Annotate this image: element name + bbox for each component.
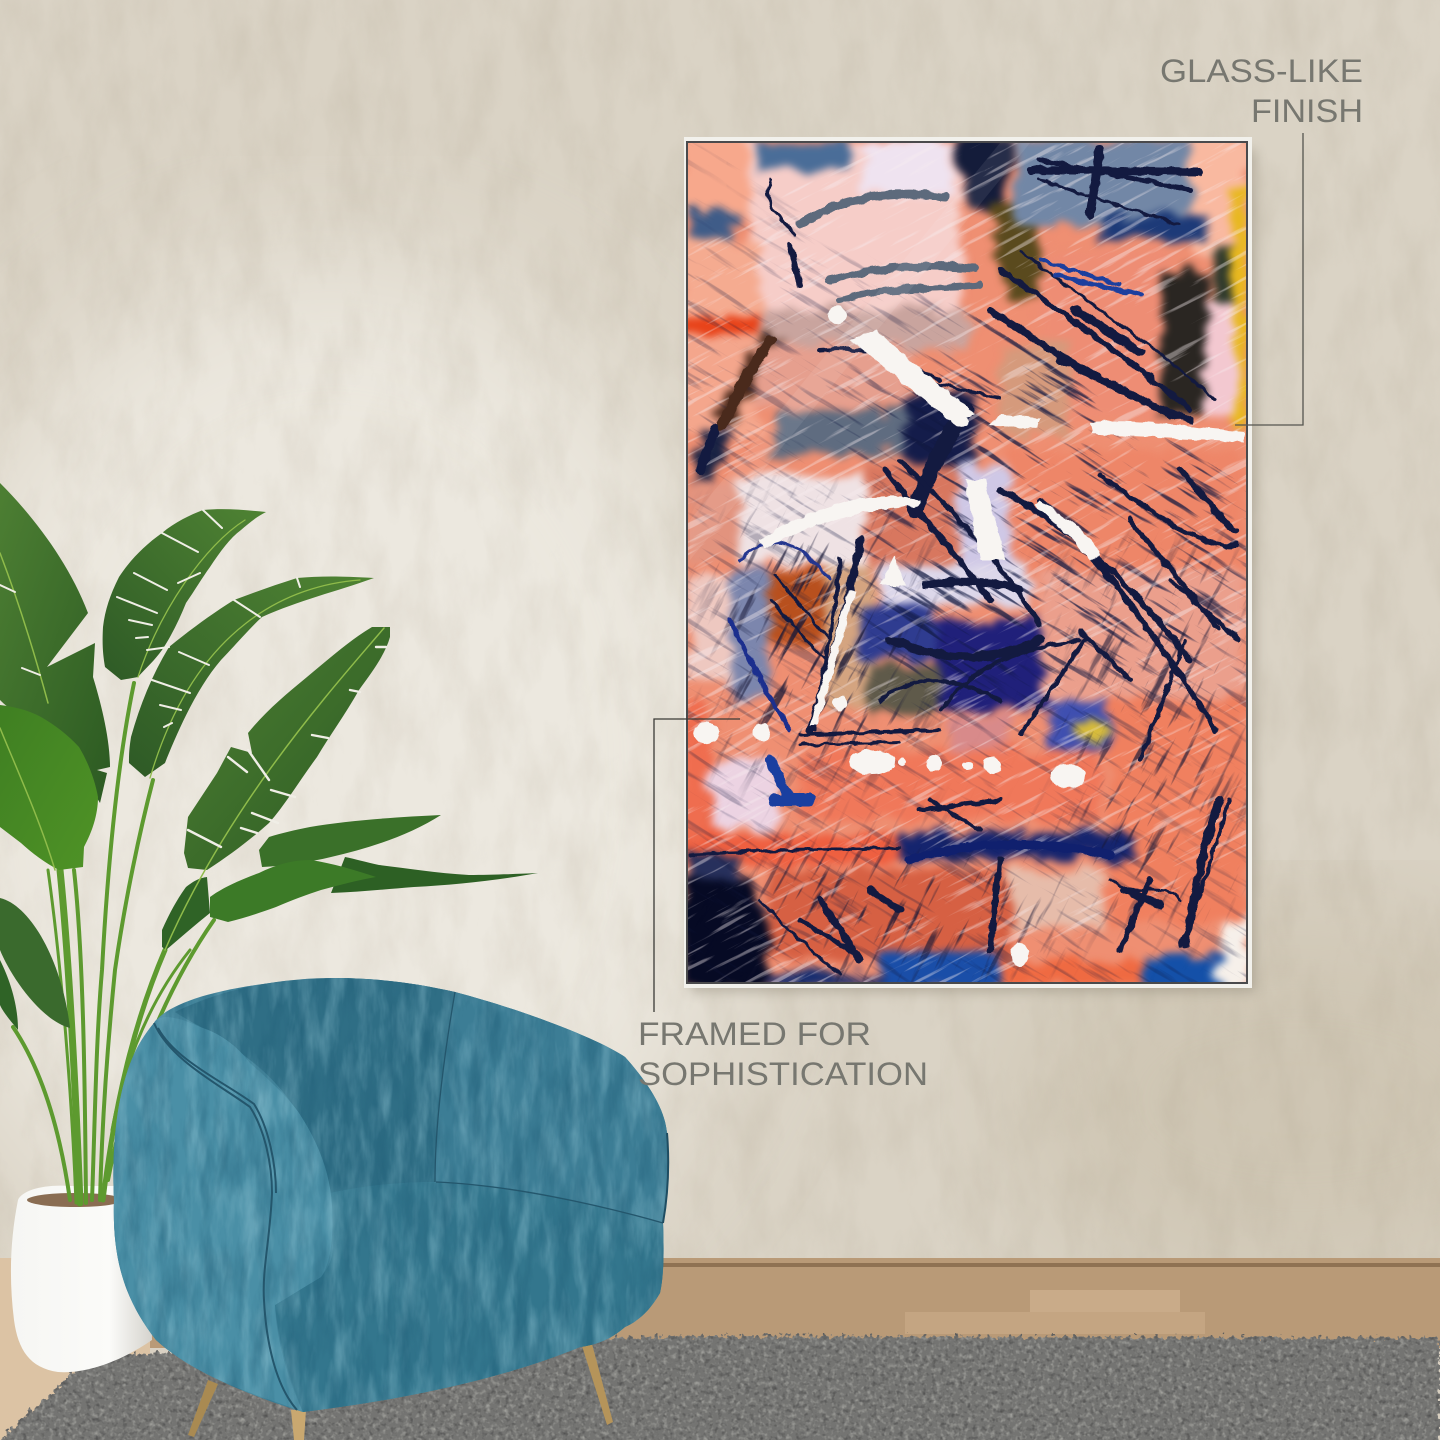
framed painting	[684, 137, 1260, 997]
paint colour blocks	[680, 130, 1250, 995]
leaf: lower left	[0, 898, 70, 1028]
leaf: large right	[184, 627, 390, 870]
plant pot	[11, 1186, 152, 1372]
armchair	[113, 978, 668, 1412]
chair leg: left	[188, 1380, 218, 1437]
chair piping	[154, 992, 668, 1410]
plant	[0, 483, 538, 1203]
leaf: far left upper	[0, 483, 110, 803]
callout: framed for sophistication	[638, 719, 928, 1092]
leaf: lower right	[210, 860, 376, 922]
leaf ribs and tears	[0, 510, 386, 950]
chair seat cushion	[275, 1182, 664, 1412]
chair leg: right	[582, 1344, 613, 1425]
callout: glass-like finish: GLASS-LIKE	[1160, 53, 1363, 89]
chair leg: centre	[291, 1410, 306, 1440]
pale streak texture	[688, 143, 1246, 982]
leaf: lower far left	[0, 960, 18, 1030]
grey rug	[0, 1336, 1440, 1440]
opposing dark streak texture	[688, 475, 1246, 982]
callout: glass-like finish: FINISH	[1251, 93, 1363, 129]
callout: framed for sophistication: SOPHISTICATION	[638, 1056, 928, 1092]
chair shell	[113, 978, 668, 1412]
leaf: front left	[0, 705, 98, 870]
leaf: top centre	[103, 509, 266, 680]
wooden floor	[0, 1258, 1440, 1440]
leaf: long thin right	[331, 857, 538, 893]
glass reflection	[690, 143, 1030, 560]
callout: framed for sophistication: FRAMED FOR	[638, 1016, 871, 1052]
diagonal dark streak texture	[688, 143, 1246, 982]
leaf: lower left of cluster	[162, 877, 210, 950]
chair back inner	[175, 978, 455, 1193]
plant stems	[13, 683, 214, 1203]
dark paint strokes	[690, 150, 1240, 975]
leaf: upper right	[129, 576, 374, 777]
chair right back panel	[435, 992, 668, 1223]
chair left arm	[113, 1017, 333, 1412]
callout: glass-like finish	[1160, 53, 1363, 425]
leaf: horizontal right	[259, 815, 441, 867]
white paint strokes and splatters	[694, 306, 1245, 967]
